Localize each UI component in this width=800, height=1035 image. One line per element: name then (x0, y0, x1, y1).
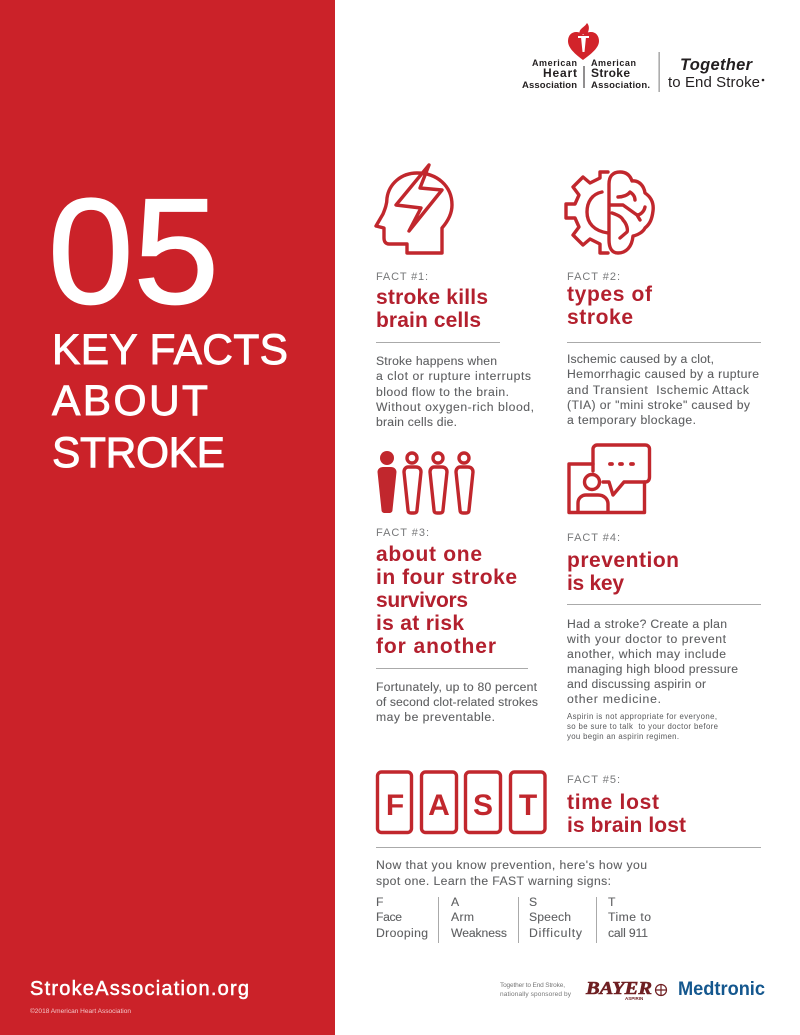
body text: Hemorrhagic caused by a rupture (567, 367, 759, 381)
body text (376, 354, 534, 429)
title: key facts about stroke: STROKE (52, 430, 225, 477)
body text: a clot or rupture interrupts (376, 369, 531, 383)
FAST warning signs columns: T (608, 895, 616, 909)
body text: Now that you know prevention, here's how you (376, 858, 647, 872)
logo: American Heart and Stroke Association, Together to End Stroke (522, 23, 764, 92)
heading (376, 286, 488, 332)
title: number 05: 05 (48, 167, 219, 335)
body text: spot one. Learn the FAST warning signs: (376, 874, 611, 888)
icon: FAST letter boxes: F (386, 789, 404, 822)
FAST warning signs columns: F (376, 895, 383, 909)
FAST warning signs columns: A (451, 895, 460, 909)
panel: fact 3 (376, 451, 538, 724)
heading (567, 791, 686, 837)
body text: with your doctor to prevent (566, 632, 727, 646)
panel: fact 4 (566, 445, 761, 741)
FAST warning signs columns: Difficulty (529, 926, 583, 940)
icon: head with lightning bolt (376, 165, 452, 253)
sponsors: nationally sponsored by (500, 991, 572, 998)
logo: American Heart and Stroke Association, Together to End Stroke: Heart (543, 66, 577, 80)
heading: brain cells (376, 309, 481, 332)
heading (567, 283, 653, 329)
logo: American Heart and Stroke Association, Together to End Stroke: Together (680, 56, 754, 74)
body text: of second clot-related strokes (376, 695, 538, 709)
FAST warning signs columns (376, 895, 651, 940)
logo: American Heart and Stroke Association, Together to End Stroke: Association (522, 80, 577, 91)
panel: fact 5 (376, 772, 761, 943)
body text: Fortunately, up to 80 percent (376, 680, 538, 694)
title: key facts about stroke (52, 327, 288, 477)
icon: FAST letter boxes: T (519, 789, 537, 822)
body text: managing high blood pressure (567, 662, 738, 676)
heading: survivors (376, 589, 468, 612)
logo: Bayer Aspirin: ASPIRIN (625, 996, 643, 1001)
body text: and discussing aspirin or (567, 677, 706, 691)
sponsors (500, 978, 765, 1001)
heading: stroke kills (376, 286, 488, 309)
FAST warning signs columns: S (529, 895, 537, 909)
body text: other medicine. (567, 692, 661, 706)
sponsors: Together to End Stroke, (500, 982, 565, 989)
body text: Had a stroke? Create a plan (567, 617, 727, 631)
heading: time lost (567, 791, 659, 814)
FAST warning signs columns: Drooping (376, 926, 428, 940)
icon: gear and brain (566, 172, 653, 253)
panel: fact 1 (376, 165, 534, 429)
aspirin note: so be sure to talk to your doctor before (567, 722, 718, 731)
body text: blood flow to the brain. (376, 385, 509, 399)
heading (567, 549, 679, 595)
heading: for another (376, 635, 496, 658)
logo: Medtronic: Medtronic (678, 979, 765, 1000)
heading: is key (567, 572, 624, 595)
heading: about one (376, 543, 482, 566)
FAST warning signs columns: Time to (608, 910, 651, 924)
body text: may be preventable. (376, 710, 495, 724)
heading: in four stroke (376, 566, 517, 589)
fact label: FACT #4: (567, 532, 620, 544)
logo: American Heart and Stroke Association, Together to End Stroke: to End Stroke (668, 74, 760, 91)
body text: Stroke happens when (376, 354, 497, 368)
icon: FAST letter boxes: S (473, 789, 493, 822)
FAST warning signs columns: call 911 (608, 926, 648, 940)
fact label: FACT #3: (376, 527, 429, 539)
panel: fact 2 (566, 172, 761, 427)
logo: Bayer Aspirin (585, 978, 666, 1001)
icon: doctor on screen with speech bubble (569, 445, 650, 512)
logo: American Heart and Stroke Association, Together to End Stroke: Stroke (591, 66, 630, 80)
logo: American Heart and Stroke Association, Together to End Stroke: Association. (591, 80, 650, 91)
copyright: ©2018 American Heart Association (30, 1007, 131, 1015)
FAST warning signs columns: Face (376, 910, 402, 924)
logo: American Heart and Stroke Association, Together to End Stroke: American (532, 58, 577, 68)
aspirin note: Aspirin is not appropriate for everyone, (567, 712, 717, 721)
heading: stroke (567, 306, 633, 329)
heading: is at risk (376, 612, 464, 635)
title: key facts about stroke: KEY FACTS (52, 327, 288, 374)
body text (566, 617, 738, 706)
logo: Bayer Aspirin: BAYER (585, 978, 652, 998)
body text: another, which may include (567, 647, 726, 661)
heading (376, 543, 517, 658)
icon: heart and torch (568, 23, 599, 60)
title: key facts about stroke: ABOUT (52, 378, 208, 425)
heading: types of (567, 283, 653, 306)
aspirin note (567, 712, 718, 741)
FAST warning signs columns: Weakness (451, 926, 507, 940)
aspirin note: you begin an aspirin regimen. (567, 732, 679, 741)
body text (567, 352, 759, 427)
body text: brain cells die. (376, 415, 457, 429)
icon: FAST letter boxes: A (428, 789, 450, 822)
body text (376, 680, 538, 724)
fact label: FACT #5: (567, 774, 620, 786)
logo: American Heart and Stroke Association, Together to End Stroke: American (591, 58, 636, 68)
icon: FAST letter boxes (378, 772, 545, 832)
heading: is brain lost (567, 814, 686, 837)
body text: a temporary blockage. (567, 413, 696, 427)
fact label: FACT #1: (376, 271, 428, 283)
body text: (TIA) or "mini stroke" caused by (567, 398, 751, 412)
website link: StrokeAssociation.org (30, 978, 249, 1000)
FAST warning signs columns: Arm (451, 910, 474, 924)
icon: four people, one filled (378, 451, 473, 513)
body text: Without oxygen-rich blood, (376, 400, 534, 414)
heading: prevention (567, 549, 679, 572)
body text: and Transient Ischemic Attack (567, 383, 750, 397)
FAST warning signs columns: Speech (529, 910, 571, 924)
fact label: FACT #2: (567, 271, 620, 283)
body text (376, 858, 647, 888)
body text: Ischemic caused by a clot, (567, 352, 714, 366)
panel: red sidebar (0, 0, 335, 1035)
